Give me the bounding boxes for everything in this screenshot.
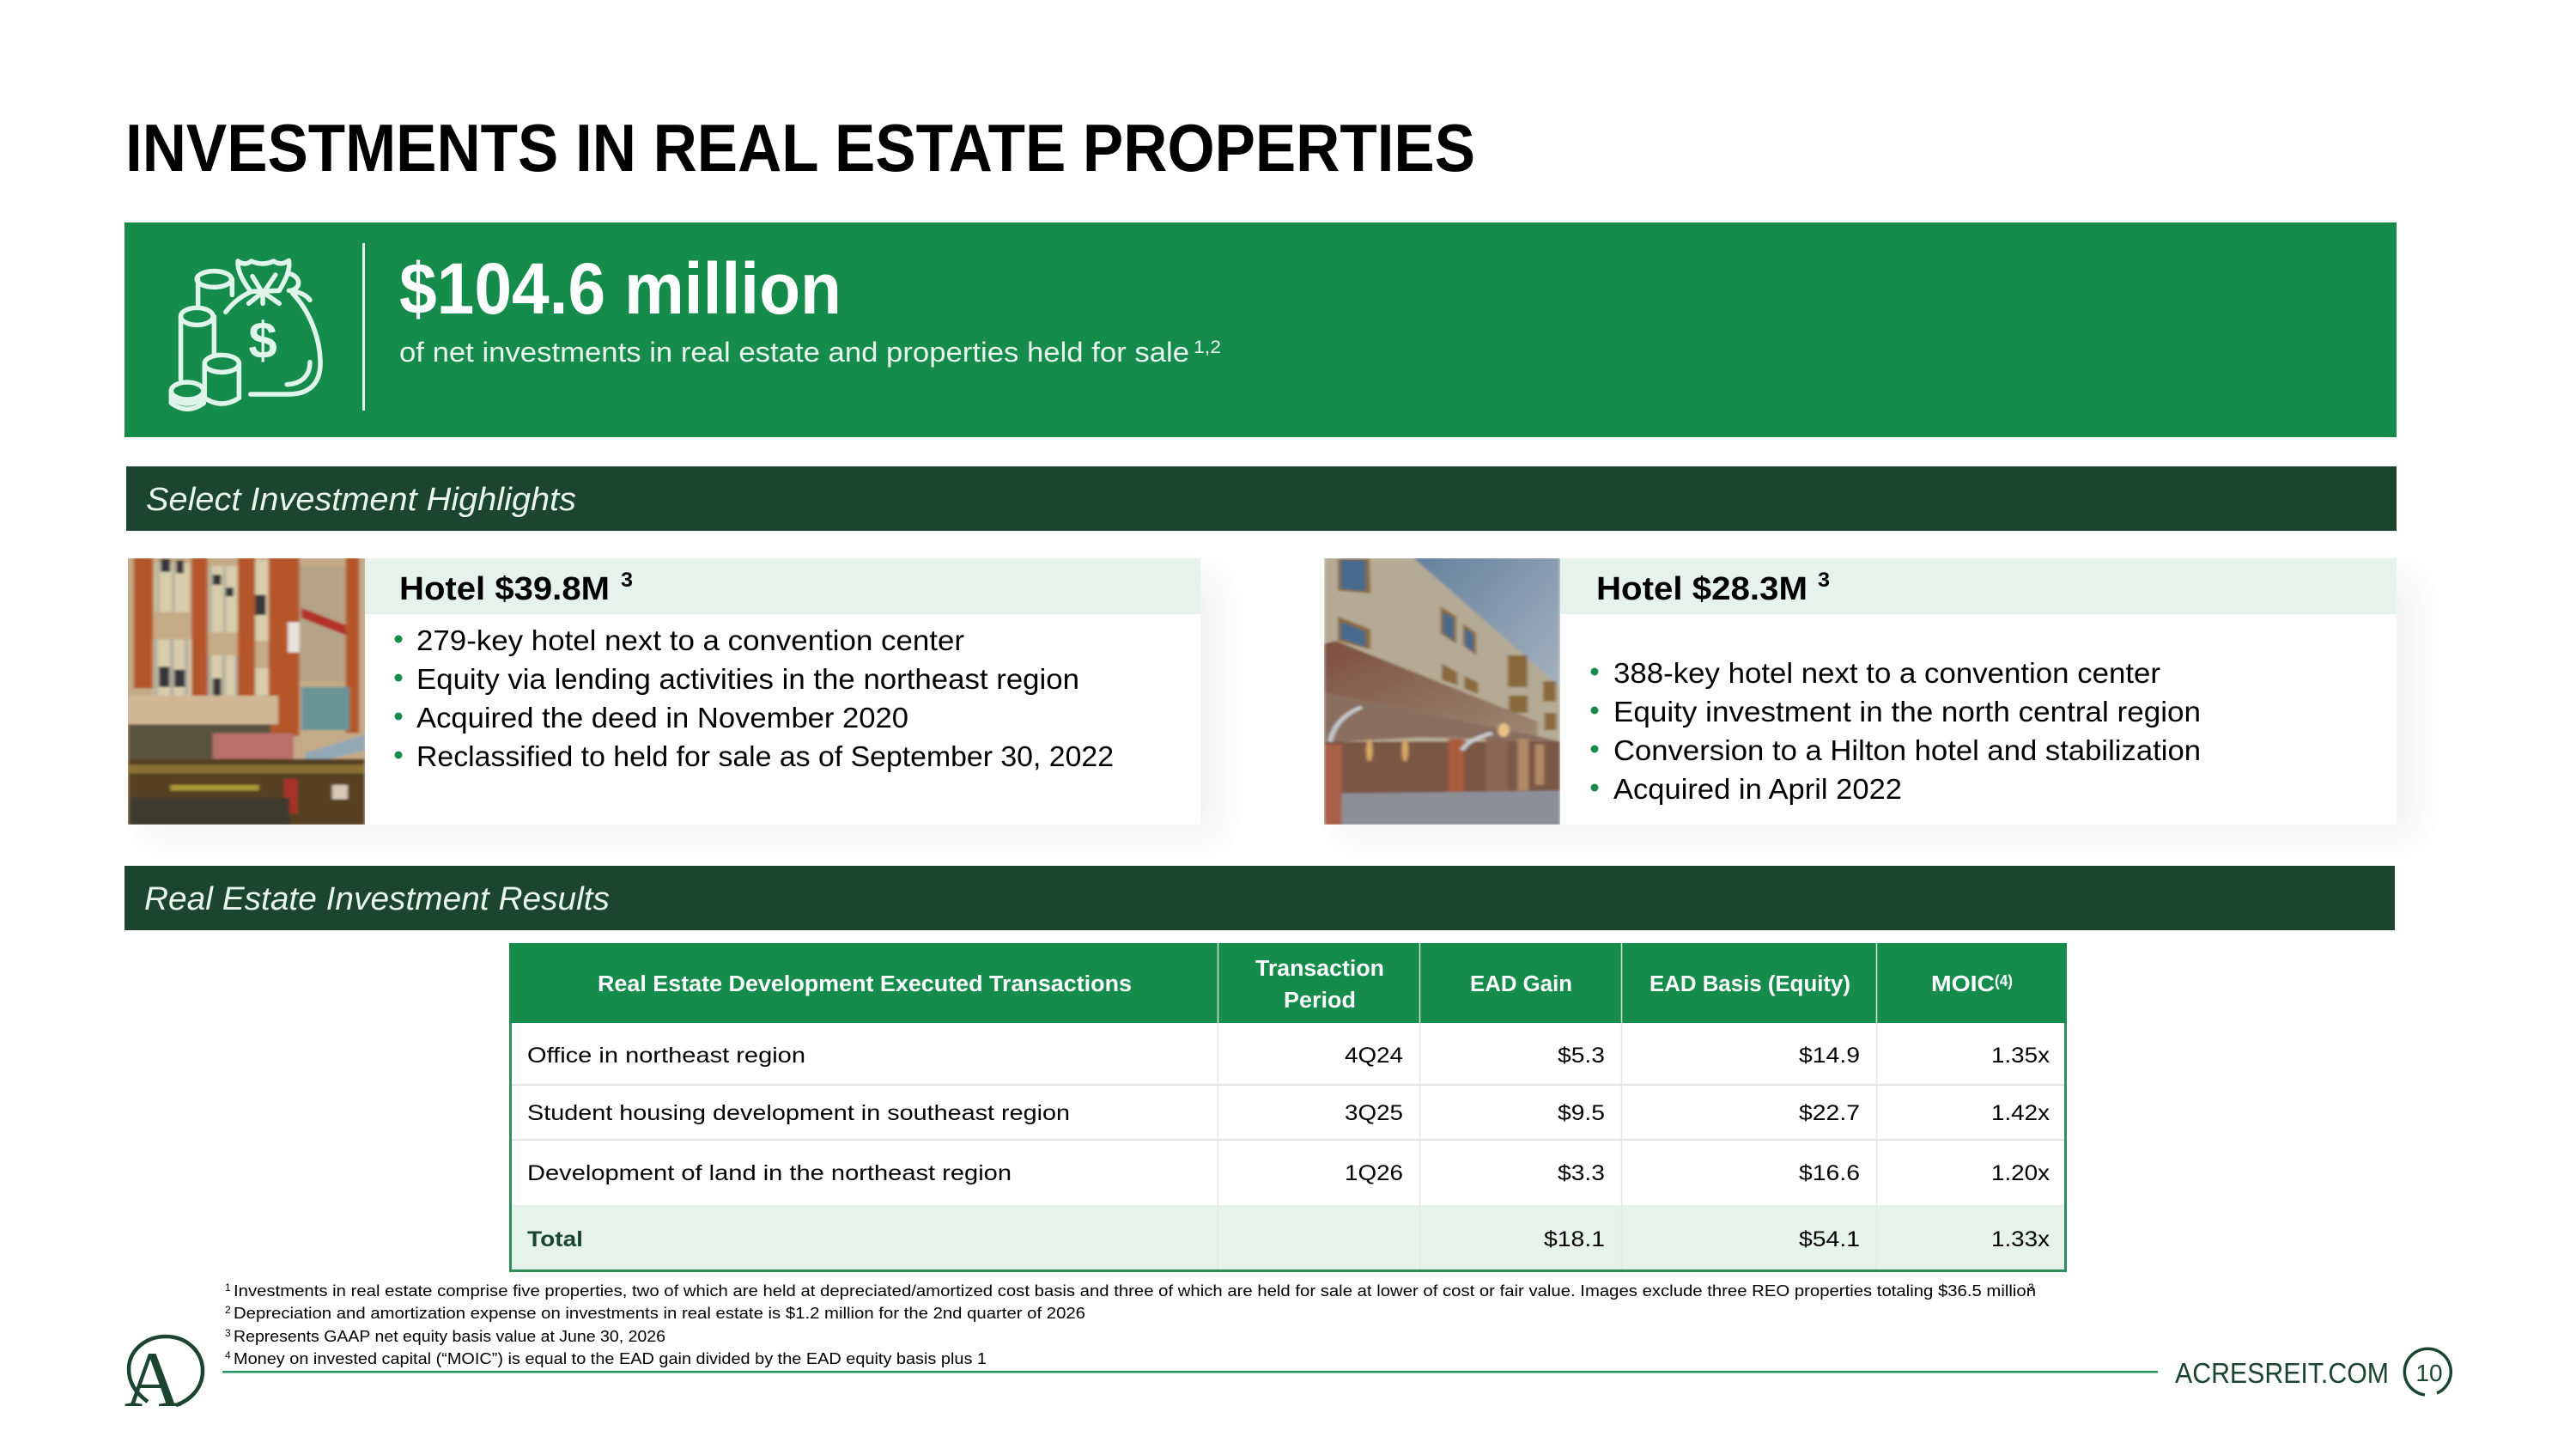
row: student housing: 3Q25 (1345, 1101, 1403, 1125)
row: office: 1.35x (1991, 1044, 2050, 1068)
footnote markers: 1,2 (1194, 338, 1221, 357)
table header: MOIC (1931, 972, 1995, 996)
row: student housing: 1.42x (1991, 1101, 2050, 1125)
row: land development: 1Q26 (1345, 1161, 1403, 1185)
section bar: real estate investment results (125, 866, 2395, 930)
footnote marker: 3 (621, 569, 633, 592)
banner subtitle: of net investments in real estate and properties held for sale (399, 337, 1189, 368)
row: office: $5.3 (1558, 1044, 1605, 1068)
bullet list: Acquired the deed in November 2020 (416, 702, 908, 734)
row: total: Total (527, 1227, 583, 1251)
footnotes: Money on invested capital (“MOIC”) is equal to the EAD gain divided by the EAD equity basis plus 1 (234, 1349, 987, 1367)
table header: Real Estate Development Executed Transactions (598, 972, 1132, 996)
row: office: 4Q24 (1345, 1044, 1403, 1068)
card heading: Hotel $39.8M (399, 571, 610, 607)
section bar: select investment highlights (126, 466, 2397, 531)
table header: Period (1284, 989, 1356, 1013)
icon: money bag and coins (171, 260, 320, 409)
header band (1560, 558, 2397, 614)
table header: (4) (1995, 972, 2013, 989)
bullet list (1590, 657, 2201, 805)
footnotes: Investments in real estate comprise five properties, two of which are held at depreciated/amortized cost basis and three of which are held for sale at lower of cost or fair value. Images exclude three REO properties totaling $36.5 million (234, 1282, 2036, 1300)
row: total: $18.1 (1544, 1227, 1605, 1251)
section bar: select investment highlights: Select Investment Highlights (146, 482, 576, 518)
footnotes (225, 1282, 2036, 1367)
section bar: real estate investment results: Real Estate Investment Results (144, 881, 610, 917)
photo: modern hotel (1324, 558, 1560, 825)
row: office: Office in northeast region (527, 1044, 805, 1068)
bullet list: Conversion to a Hilton hotel and stabilization (1613, 734, 2201, 766)
row: land development: $16.6 (1799, 1161, 1860, 1185)
footnotes: 4 (225, 1349, 231, 1361)
table header: Transaction (1255, 957, 1384, 981)
footnotes: 3 (225, 1327, 231, 1339)
footnotes: Depreciation and amortization expense on investments in real estate is $1.2 million for the 2nd quarter of 2026 (234, 1304, 1085, 1322)
footer website: ACRESREIT.COM (2175, 1357, 2389, 1389)
panel: hotel 39.8M (120, 557, 1219, 837)
footnotes: 2 (225, 1304, 231, 1316)
footer rule (222, 1371, 2158, 1373)
footnotes: Represents GAAP net equity basis value at June 30, 2026 (234, 1327, 665, 1345)
title: INVESTMENTS IN REAL ESTATE PROPERTIES (125, 110, 1475, 186)
bullet list: Acquired in April 2022 (1613, 773, 1902, 805)
bullet list (395, 624, 1114, 772)
bullet list: 388-key hotel next to a convention center (1613, 657, 2160, 689)
table header (509, 943, 2067, 1023)
table header: EAD Gain (1470, 972, 1572, 996)
footnote marker: 3 (1818, 569, 1830, 592)
row: student housing: Student housing development in southeast region (527, 1101, 1070, 1125)
big number: $104.6 million (399, 248, 841, 329)
bullet list: Reclassified to held for sale as of September 30, 2022 (416, 740, 1114, 772)
bullet list: 279-key hotel next to a convention center (416, 624, 964, 656)
row: student housing: $22.7 (1799, 1101, 1860, 1125)
photo: brick hotel (128, 558, 365, 825)
row: land development: 1.20x (1991, 1161, 2050, 1185)
bullet list: Equity via lending activities in the northeast region (416, 663, 1079, 695)
card heading: Hotel $28.3M (1596, 571, 1807, 607)
row: land development (527, 1161, 2050, 1185)
footnotes: 1 (225, 1282, 231, 1294)
row: student housing: $9.5 (1558, 1101, 1605, 1125)
table: executed transactions (509, 943, 2067, 1271)
row: total: $54.1 (1799, 1227, 1860, 1251)
row: office (527, 1044, 2050, 1068)
row: office: $14.9 (1799, 1044, 1860, 1068)
row: total (527, 1227, 2050, 1251)
table header: EAD Basis (Equity) (1649, 972, 1850, 996)
header band (365, 558, 1200, 614)
row: land development: $3.3 (1558, 1161, 1605, 1185)
row: total: 1.33x (1991, 1227, 2050, 1251)
bullet list: Equity investment in the north central region (1613, 696, 2201, 728)
row: student housing (527, 1101, 2050, 1125)
footnotes: 3 (2028, 1282, 2034, 1294)
panel: hotel 28.3M (1324, 557, 2415, 837)
page number (2404, 1349, 2451, 1395)
divider (362, 243, 365, 411)
panel: net investments banner (125, 222, 2397, 437)
logo: Acres monogram: A (125, 1336, 181, 1423)
icon: dollar sign on bag: $ (248, 312, 277, 369)
page number: 10 (2415, 1360, 2443, 1386)
row: land development: Development of land in the northeast region (527, 1161, 1012, 1185)
